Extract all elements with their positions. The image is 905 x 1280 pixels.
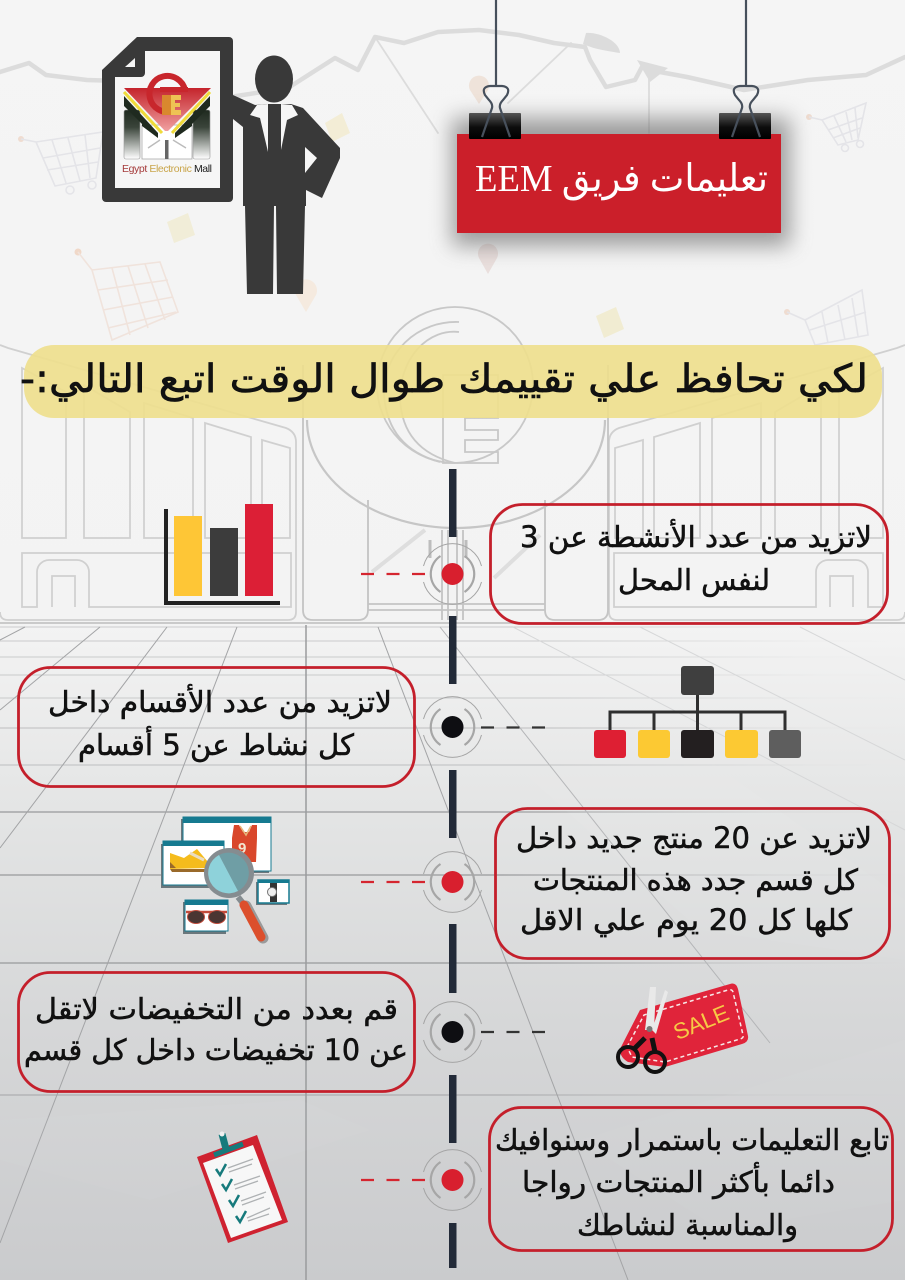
banner board [457, 134, 781, 233]
timeline spine [449, 469, 456, 1268]
callout 3: كلها كل 20 يوم علي الاقل [520, 903, 852, 938]
connector 4 [481, 1031, 546, 1033]
callout 5: دائما بأكثر المنتجات رواجا [522, 1161, 835, 1199]
background: mall outline [0, 307, 905, 623]
presenter with logo document [102, 37, 340, 294]
step 5 [197, 1108, 892, 1250]
icon: sale tag: SALE [670, 1000, 733, 1045]
icon: product search: 9 [238, 840, 246, 857]
node 3 [424, 852, 482, 912]
icon: org chart [594, 666, 801, 758]
callout 4: قم بعدد من التخفيضات لاتقل [35, 992, 398, 1027]
callout 5: والمناسبة لنشاطك [577, 1208, 798, 1242]
icon: sale tag [618, 984, 748, 1072]
connector 2 [481, 726, 546, 729]
banner title: تعليمات فريق EEM [475, 158, 768, 201]
background: floor perspective lines [0, 625, 905, 1280]
glasses window [183, 902, 226, 934]
callout 3: كل قسم جدد هذه المنتجات [533, 863, 858, 898]
icon: product search [161, 817, 289, 938]
big arc and logo [307, 420, 605, 528]
connector 3 [361, 881, 425, 883]
background: faded carts [18, 103, 868, 345]
node 5 [424, 1150, 482, 1210]
node 4 [424, 1002, 482, 1062]
step 2 [18, 666, 801, 786]
logo: Egypt Electronic Mall [122, 163, 212, 175]
binder clip right [719, 86, 771, 139]
callout 3 [496, 808, 890, 958]
node 2 [424, 697, 482, 757]
title banner [452, 0, 790, 246]
callout 2: كل نشاط عن 5 أقسام [78, 725, 354, 762]
icon: document [102, 37, 233, 202]
subtitle band: لكي تحافظ علي تقييمك طوال الوقت اتبع التالي:- [20, 357, 868, 402]
callout 3: لاتزيد عن 20 منتج جديد داخل [516, 821, 872, 855]
callout 2: لاتزيد من عدد الأقسام داخل [48, 683, 392, 719]
shoe window [161, 844, 222, 888]
callout 4 [18, 972, 414, 1092]
callout 5: تابع التعليمات باستمرار وسنوافيك [495, 1123, 889, 1157]
callout 2 [18, 668, 414, 786]
hanging strings [496, 0, 746, 86]
cart top right [806, 103, 866, 152]
subtitle band [20, 345, 882, 418]
door panels [124, 110, 140, 159]
cart lower right [784, 290, 868, 345]
scissors [645, 987, 668, 1034]
callout 1: لنفس المحل [618, 563, 770, 597]
step 1 [166, 504, 888, 624]
left wing [0, 345, 296, 620]
icon: man [233, 56, 340, 294]
connector 1 [361, 573, 425, 575]
banner shadow [452, 118, 790, 246]
magnifier [204, 848, 254, 898]
cart top left [18, 132, 103, 194]
center door frame [0, 365, 905, 623]
callout 5 [490, 1108, 892, 1250]
yellow stripes [124, 92, 210, 133]
callout 4: عن 10 تخفيضات داخل كل قسم [24, 1033, 408, 1068]
dark wedges [124, 96, 158, 138]
E mark [162, 95, 171, 115]
step 3 [161, 808, 890, 958]
right wing [609, 345, 905, 620]
callout 1 [490, 504, 888, 624]
icon: checklist [197, 1132, 288, 1243]
watch window [256, 882, 287, 905]
binder clip left [469, 86, 521, 139]
red V [124, 88, 211, 131]
step 4 [18, 972, 748, 1092]
connector 5 [361, 1179, 425, 1181]
callout 1: لاتزيد من عدد الأنشطة عن 3 [520, 518, 872, 554]
logo [122, 76, 212, 175]
jersey window [181, 819, 269, 873]
cart lower left [74, 248, 178, 340]
node 1 [424, 544, 482, 604]
background: faded bags and pins [167, 76, 624, 338]
background: map line [0, 30, 905, 133]
ring [146, 78, 188, 88]
icon: bar chart [166, 504, 280, 603]
